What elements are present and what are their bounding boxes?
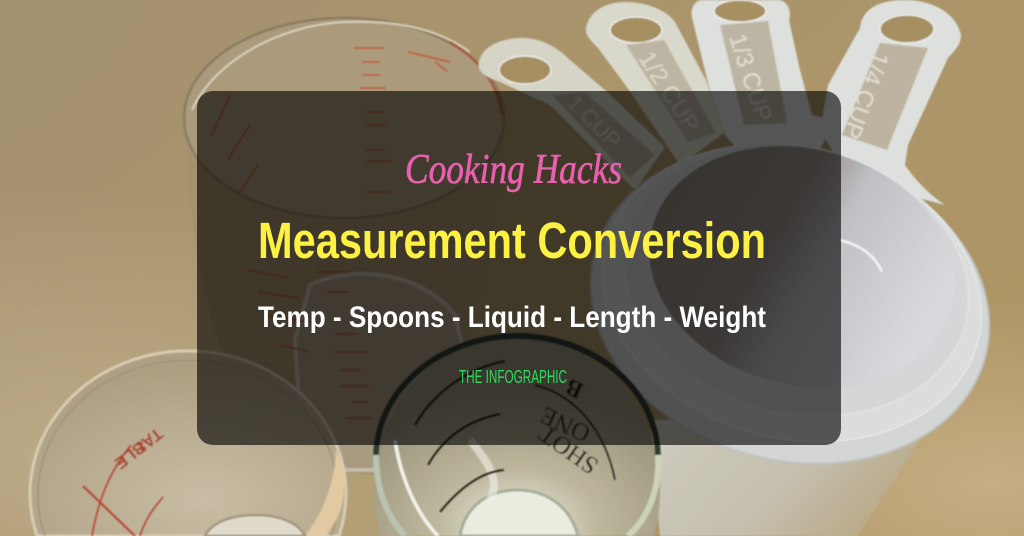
heading: Cooking Hacks: Cooking Hacks: [405, 147, 622, 193]
photo: 1 cup handle: [479, 38, 665, 190]
photo: small glass cup: 2: [134, 439, 149, 455]
photo: shot glass: SHOT: [534, 420, 603, 479]
photo: 1/2 cup handle: 1/2 CUP: [633, 47, 705, 137]
photo: 1 cup handle: 1 CUP: [562, 90, 626, 153]
photo: small glass cup: TABLE: [111, 424, 166, 473]
photo: 1/3 cup handle: [692, 0, 835, 175]
photo: 1/2 cup handle: [586, 2, 724, 165]
panel: dark rounded overlay: [197, 91, 841, 445]
photo: large glass measuring cup: [184, 18, 504, 475]
photo: 1/3 cup handle: 1/3 CUP: [723, 31, 777, 125]
photo: 1/4 cup handle: 1/4 CUP: [837, 48, 894, 142]
photo: shot glass: B: [562, 373, 588, 403]
subtitle: measurement categories: Temp - Spoons - Liquid - Length - Weight: [258, 301, 766, 334]
photo: shot glass: ONE: [537, 401, 595, 447]
photo: small glass cup: [30, 351, 346, 536]
photo: nested plastic measuring cups: [555, 103, 1024, 536]
photo: shot glass: [374, 335, 660, 536]
title: Measurement Conversion: Measurement Conversion: [258, 212, 766, 269]
photo: 1/4 cup handle: [820, 0, 961, 205]
label: The Infographic: THE INFOGRAPHIC: [459, 367, 567, 387]
